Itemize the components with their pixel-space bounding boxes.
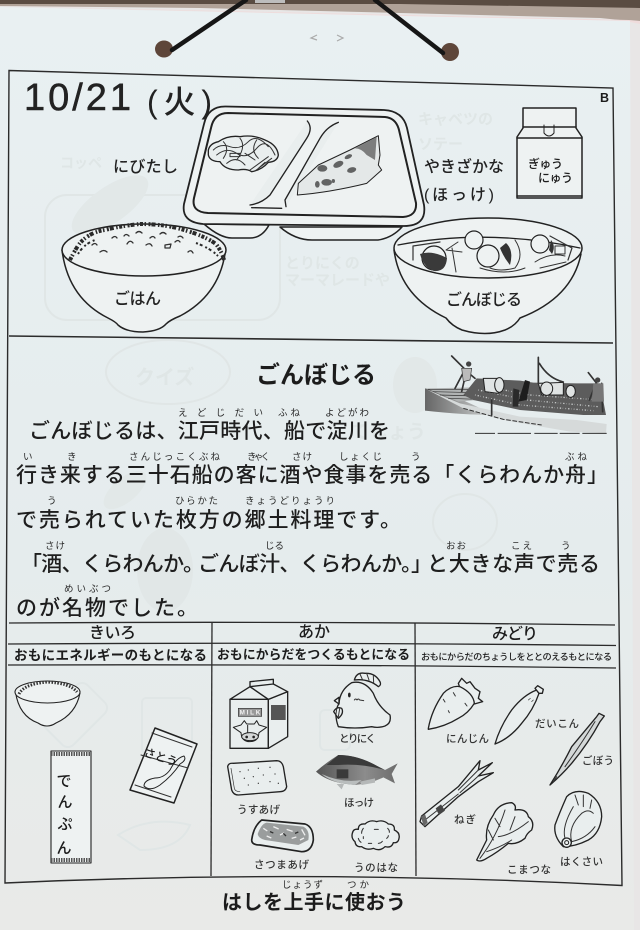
show-through ghost print from reverse side: コッペ (60, 155, 102, 171)
column caption: green: おもにからだのちょうしをととのえるもとになる (421, 652, 612, 662)
rice bowl (62, 224, 226, 332)
line 2: 行き来する三十石船の客に酒や食事を売る「くらわんか舟」 (16, 464, 608, 487)
icon: carrot (428, 678, 483, 729)
column heading: yellow: きいろ (89, 624, 136, 642)
icon: milk pack (230, 679, 288, 748)
label: unohana: うのはな (354, 862, 398, 874)
icon: napa cabbage (555, 791, 602, 847)
show-through ghost print from reverse side: てしょう (350, 422, 426, 443)
tray illustration (184, 106, 424, 240)
icon: komatsuna (477, 803, 533, 861)
grilled fish (297, 136, 382, 195)
line 1: ごんぼじるは、江戸時代、船で淀川を (29, 420, 390, 443)
picture: kurawanka boat (425, 356, 607, 433)
tray body (184, 106, 424, 226)
icon: sugar bag: さとう (142, 746, 179, 769)
line 1 furigana: ふね (278, 408, 300, 419)
line 4 furigana: さけ (45, 541, 65, 552)
label: daikon: だいこん (535, 718, 579, 730)
divider, nibitashi and fish in zoomed coordinates (208, 121, 382, 208)
label: satsumaage: さつまあげ (254, 859, 310, 871)
line 3 furigana: ひらかた (175, 496, 218, 507)
line 4 furigana: こえ (511, 541, 532, 552)
explanatory text (16, 407, 608, 620)
column heading: red: あか (298, 623, 330, 641)
line 2 furigana: う (411, 452, 421, 463)
icon: unohana (352, 821, 399, 850)
show-through ghost print from reverse side (40, 111, 497, 850)
label: komatsuna: こまつな (507, 864, 551, 876)
icon: milk pack: MILK (240, 710, 261, 717)
tray feet (204, 224, 402, 240)
line 4 furigana: じる (265, 541, 284, 552)
show-through ghost print from reverse side: クイズ (135, 365, 194, 389)
line 2 furigana: き (67, 452, 77, 463)
line 2 furigana: きゃく (247, 452, 270, 463)
footer furigana: じょうず (282, 880, 323, 891)
icon: starch packet (51, 751, 91, 863)
line 2 furigana (23, 452, 587, 463)
icon: milk carton: ぎゅう (528, 156, 563, 171)
gonbo soup bowl (394, 218, 582, 334)
line 4: ごんぼ汁、くらわんか。」 (198, 553, 432, 576)
title: date: 10/21 (24, 77, 131, 119)
line 2 furigana: ぶね (565, 452, 587, 463)
footer message (222, 880, 406, 914)
icon: milk carton (517, 108, 582, 198)
line 3 furigana: う (47, 496, 57, 507)
heading: gonbojiru: ごんぼじる (256, 361, 376, 389)
icon: green onion (420, 761, 493, 827)
icon: small rice bowl (15, 681, 80, 726)
icon: milk carton: にゅう (538, 171, 573, 185)
column caption: yellow: おもにエネルギーのもとになる (14, 648, 207, 663)
line 4 furigana: う (561, 541, 571, 552)
gonbo soup bowl: ごんぼじる (446, 291, 522, 309)
icon: sugar bag (130, 728, 197, 803)
icon: satsumaage (252, 820, 313, 852)
line 2 furigana: い (23, 452, 33, 463)
footer furigana: つか (347, 880, 369, 891)
label: carrot: にんじん (446, 733, 489, 745)
line 3 furigana (47, 496, 335, 507)
title: date (24, 77, 212, 120)
label: hokke: ほっけ (344, 797, 374, 809)
column caption: red: おもにからだをつくるもとになる (217, 647, 410, 662)
line 4 (21, 553, 600, 576)
soup ingredients (413, 231, 572, 272)
version mark B: B (600, 91, 609, 105)
line 1 furigana (178, 407, 369, 419)
show-through ghost print from reverse side: ソテー (418, 136, 463, 153)
icon: burdock (550, 713, 604, 785)
label: grilled fish: やきざかな (424, 157, 504, 176)
icon: thin fried tofu (228, 761, 287, 795)
line 5: のが名物でした。 (16, 597, 198, 620)
food group table grid (8, 622, 616, 876)
line 1 furigana: えどじだい (178, 408, 263, 419)
footer furigana (282, 880, 369, 891)
show-through ghost print from reverse side: とりにくの (285, 255, 360, 272)
line 5 furigana: めいぶつ (64, 584, 111, 595)
line 3 furigana: きょうどりょうり (245, 496, 335, 507)
icon: starch packet: で (56, 773, 72, 790)
icon: hokke fish (316, 755, 398, 789)
line 2 furigana: さんじっこくぶね (129, 452, 220, 463)
rice bowl: ごはん (114, 290, 161, 308)
line 4 furigana (45, 541, 571, 552)
title: date: (火) (147, 84, 212, 120)
line 2 furigana: しょくじ (339, 452, 382, 463)
icon: daikon (495, 686, 543, 744)
line 1 furigana: よどがわ (325, 407, 369, 419)
column heading: green: みどり (492, 625, 538, 643)
label: burdock: ごぼう (582, 754, 614, 767)
icon: starch packet: ん (56, 840, 72, 857)
icon: chicken (334, 673, 390, 728)
nibitashi (208, 136, 278, 172)
label: usuage: うすあげ (237, 804, 280, 816)
label: chicken: とりにく (339, 733, 376, 745)
icon: starch packet: ぷ (57, 816, 73, 833)
label: nibitashi: にびたし (113, 158, 178, 176)
label: hokke: (ほっけ) (424, 187, 494, 204)
line 4: 「酒、くらわんか。 (21, 553, 204, 576)
line 4: と大きな声で売る (427, 553, 600, 576)
line 3: で売られていた枚方の郷土料理です。 (16, 509, 401, 532)
line 2 furigana: さけ (292, 452, 312, 463)
label: green onion: ねぎ (454, 813, 476, 826)
hanging holes and string (155, 0, 459, 61)
icon: starch packet: ん (57, 794, 73, 811)
line 4 furigana: おお (446, 541, 466, 552)
show-through ghost print from reverse side: マーマレードや (285, 272, 390, 289)
footer message: はしを上手に使おう (222, 891, 406, 914)
label: napa cabbage: はくさい (560, 856, 603, 868)
show-through ghost print from reverse side: キャベツの (418, 111, 493, 128)
